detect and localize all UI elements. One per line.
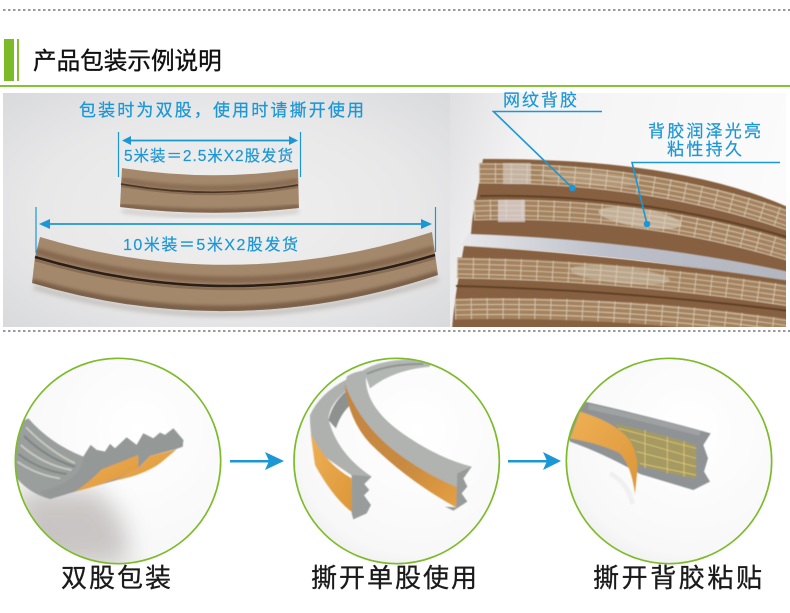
circle: double strip [10, 358, 221, 564]
arrow: 5m dimension [118, 132, 300, 177]
adhesive tape [75, 455, 138, 492]
section heading [0, 39, 790, 87]
caption: double strip: 双股包装 [61, 563, 171, 593]
upper adhesive strip [471, 159, 790, 272]
text: glossy adhesive label: 背胶润泽光亮 [648, 122, 761, 141]
strip body [10, 418, 183, 499]
arrow: step one to two [230, 452, 284, 470]
short double strip [120, 168, 299, 213]
circle ring [294, 358, 499, 564]
top dotted divider [3, 9, 790, 11]
arrow: step two to three [508, 452, 561, 470]
text: 10m label: 10米装＝5米X2股发货 [123, 236, 298, 254]
circle ring [15, 358, 221, 564]
text: glossy adhesive label [648, 122, 761, 159]
text: mesh backing label: 网纹背胶 [503, 91, 577, 110]
text: glossy adhesive label: 粘性持久 [667, 140, 742, 159]
panel: packaging lengths photo [3, 93, 450, 327]
caption: peel backing: 撕开背胶粘贴 [593, 563, 762, 593]
leader: mesh backing [494, 112, 602, 190]
title: 产品包装示例说明 [33, 48, 222, 75]
leader: glossy adhesive [632, 162, 780, 226]
arrow: 10m dimension [36, 207, 436, 253]
text: 5m label: 5米装＝2.5米X2股发货 [124, 147, 293, 165]
panel: adhesive backing photo [450, 93, 790, 336]
green accent bars [4, 39, 19, 81]
right strip [346, 370, 472, 488]
lower adhesive strip [452, 246, 790, 336]
green underline [0, 85, 790, 87]
background strip coil [363, 359, 430, 388]
mesh backing [615, 423, 696, 478]
peeled tape [570, 412, 637, 494]
left strip [310, 379, 372, 477]
bottom dotted divider [3, 330, 790, 332]
long double strip [32, 232, 438, 311]
circle: separated strips [294, 358, 499, 564]
circle ring [566, 358, 772, 564]
circle: peeling backing [563, 358, 772, 564]
caption: single strip: 撕开单股使用 [311, 563, 477, 593]
text: double strip note: 包装时为双股，使用时请撕开使用 [79, 100, 364, 120]
